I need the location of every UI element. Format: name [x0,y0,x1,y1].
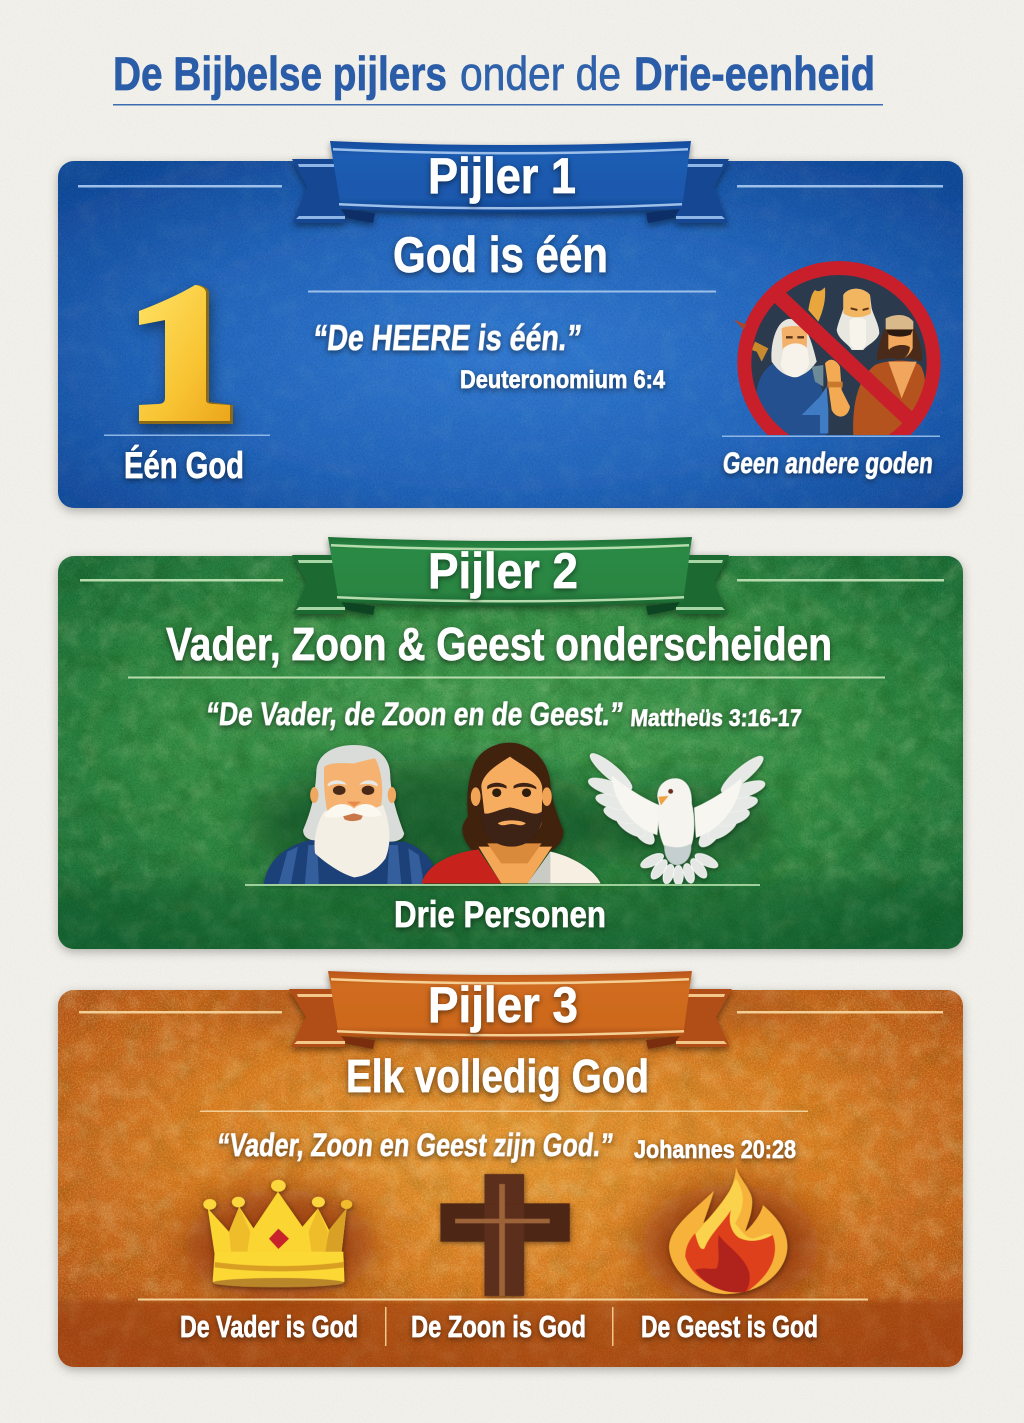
banner lines [79,1011,943,1014]
panel 1 background [58,161,963,508]
middle elder [837,289,879,350]
left elder [755,363,827,435]
title: onder de [460,47,621,100]
left wing [586,749,658,848]
panel 2 background [58,556,963,949]
icons row [203,1167,787,1296]
ribbon [292,141,729,223]
icon: crown [203,1180,352,1287]
icon: flame [669,1167,787,1294]
icon: cross [440,1174,570,1296]
heading: Elk volledig God: Elk volledig God [346,1050,649,1102]
quote: “De HEERE is één.” [311,317,583,358]
title: De Bijbelse pijlers [113,47,447,100]
icon: no other gods [734,268,934,457]
banner lines [78,185,943,188]
illustration: Father, Son and Spirit [264,743,767,885]
label: Drie Personen: Drie Personen [394,894,606,935]
raised arm [825,360,850,417]
icon: golden number one [139,285,233,424]
right wing [694,752,767,850]
quote: “Vader, Zoon en Geest zijn God.” [215,1127,615,1163]
label: Één God: Één God [124,445,244,486]
reference: Johannes 20:28 [634,1136,796,1164]
panel: pijler 3 [58,965,963,1367]
figure: the Father [264,745,435,884]
panel 3 background [58,965,963,1367]
banner lines [80,579,944,582]
raised hand [808,287,825,322]
title [113,47,883,106]
figure: the Son [422,743,601,883]
label: Geen andere goden: Geen andere goden [721,448,935,480]
ribbon [289,971,732,1049]
panel: pijler 2 [58,537,963,949]
label: De Zoon is God: De Zoon is God [411,1309,586,1344]
reference: Deuteronomium 6:4 [460,366,665,394]
body [657,778,694,859]
ribbon [292,537,729,615]
reference: Mattheüs 3:16-17 [630,705,802,732]
figure: the dove [586,749,767,885]
tail [638,851,720,885]
heading: Pijler 1: Pijler 1 [428,148,576,204]
heading: Vader, Zoon & Geest onderscheiden: Vader, Zoon & Geest onderscheiden [166,618,832,670]
quote: “De Vader, de Zoon en de Geest.” [204,696,625,732]
heading: Pijler 2: Pijler 2 [428,543,578,599]
heading: Pijler 3: Pijler 3 [428,977,578,1033]
right figure [853,361,926,435]
heading: God is één: God is één [393,227,608,283]
panel: pijler 1 [58,141,963,508]
title: Drie-eenheid [634,47,875,100]
label: De Geest is God: De Geest is God [641,1309,818,1344]
label: De Vader is God: De Vader is God [180,1309,358,1344]
